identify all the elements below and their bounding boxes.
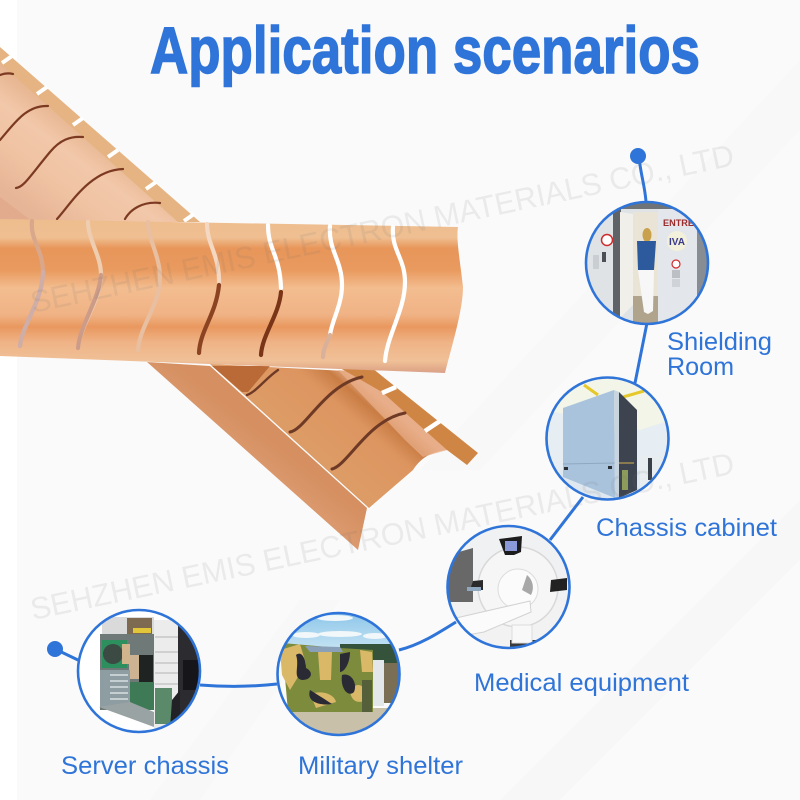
end dot [630, 148, 646, 164]
label: server chassis: Server chassis [61, 752, 229, 780]
wave slits [20, 221, 405, 361]
photo: shielding room [585, 200, 711, 326]
label: military shelter: Military shelter [298, 752, 463, 780]
copper strip: back piece [0, 47, 200, 222]
door sign text: ENTRE [663, 218, 694, 228]
label: chassis cabinet: Chassis cabinet [596, 514, 777, 542]
watermark lower: SEHZHEN EMIS ELECTRON MATERIALS CO., LTD [27, 446, 737, 627]
copper strip: lower piece [147, 362, 478, 550]
photo: shielding room: IVA [669, 237, 685, 248]
photo: medical equipment [446, 524, 572, 652]
connector line [55, 156, 647, 686]
person [637, 228, 656, 314]
label: shielding room: Room [667, 353, 734, 381]
copper strip: front piece [0, 219, 463, 373]
photo: server chassis [76, 608, 202, 734]
start dot [47, 641, 63, 657]
label: shielding room: Shielding [667, 328, 772, 356]
photo: military shelter [276, 612, 402, 738]
photo: chassis cabinet [545, 376, 671, 502]
watermark upper: SEHZHEN EMIS ELECTRON MATERIALS CO., LTD [27, 138, 737, 320]
label: medical equipment: Medical equipment [474, 669, 689, 697]
